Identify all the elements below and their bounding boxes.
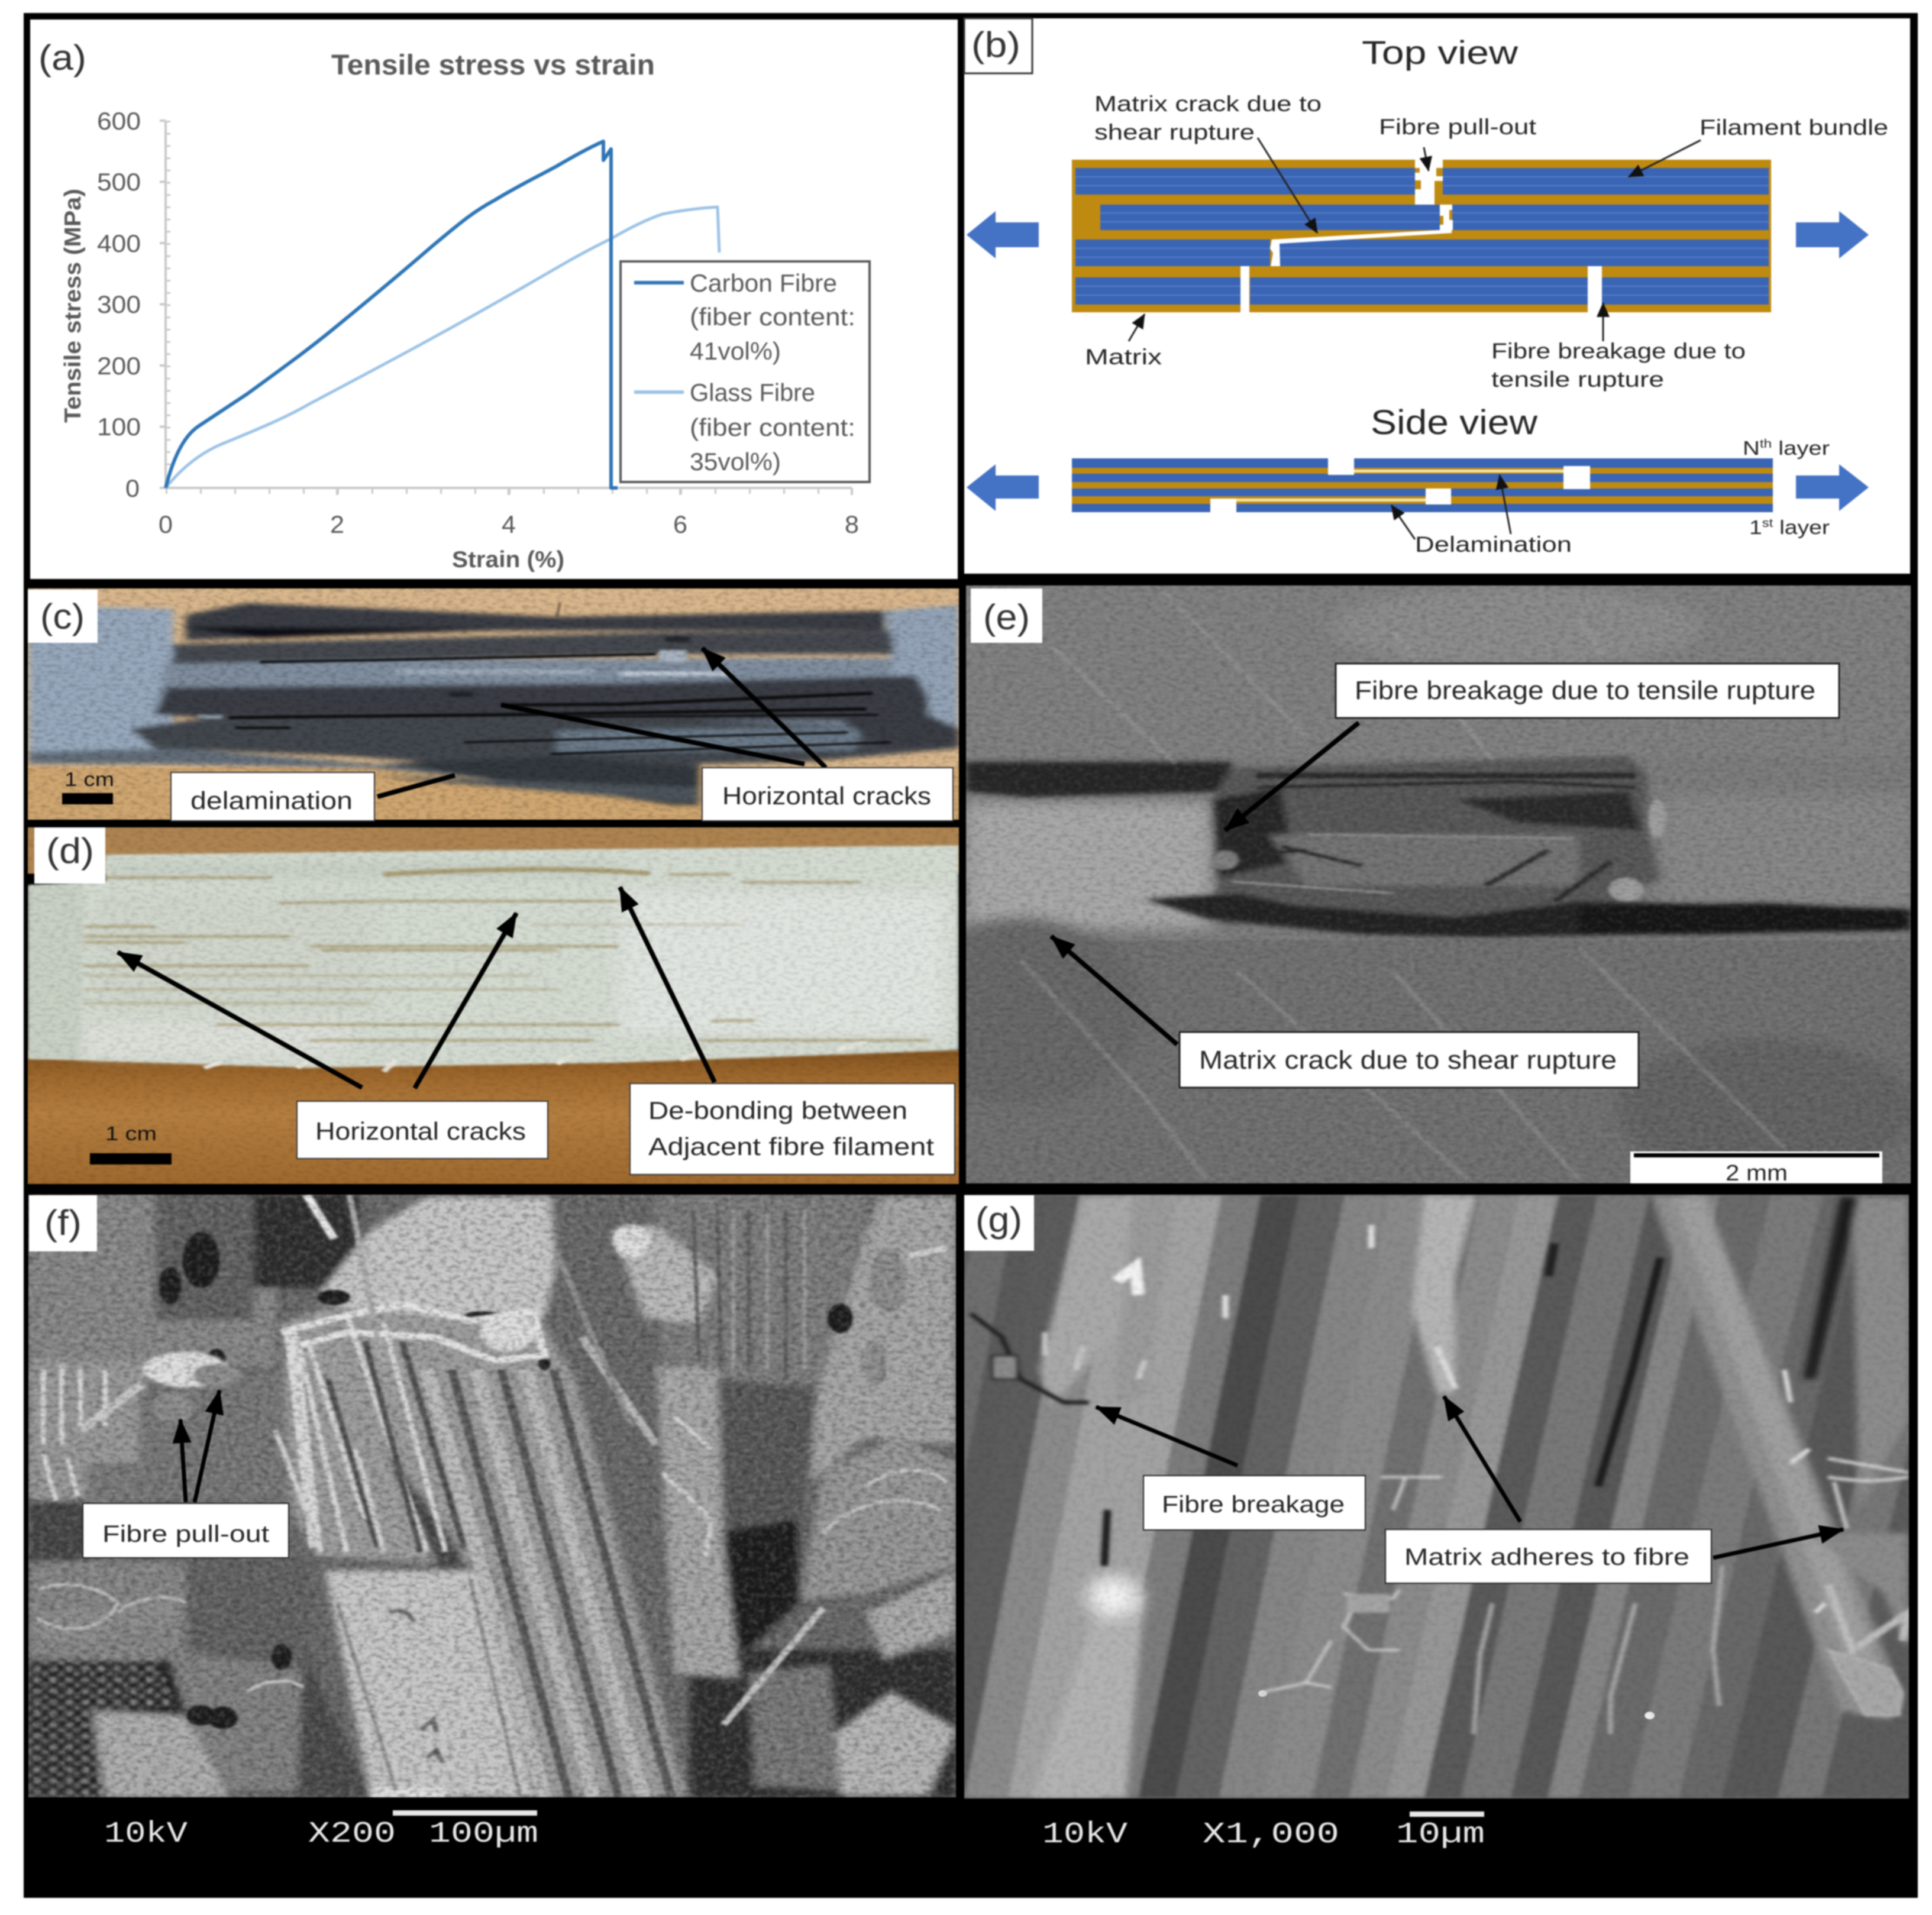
chart title: Tensile stress vs strain xyxy=(331,50,655,81)
y axis tick labels: 300 xyxy=(97,290,141,318)
top view labels: Matrix crack due to xyxy=(1094,92,1322,116)
scale bar d: 1 cm xyxy=(105,1123,157,1144)
SEM data bar f: X200 xyxy=(308,1817,396,1851)
legend: (fiber content: xyxy=(690,303,855,331)
side view tension arrows xyxy=(967,464,1869,511)
y axis tick labels xyxy=(97,107,141,502)
photo d xyxy=(25,827,965,1191)
callout: horizontal cracks d xyxy=(297,1101,548,1159)
top view labels: Fibre pull-out xyxy=(1379,115,1537,139)
y axis tick labels: 100 xyxy=(97,413,141,441)
y axis tick labels: 600 xyxy=(97,107,141,135)
panel c: carbon fibre specimen photo xyxy=(25,587,965,823)
label (g): (g) xyxy=(975,1200,1022,1240)
scale bar d xyxy=(90,1123,172,1164)
fibre bands xyxy=(815,1195,1932,1797)
top view leader lines xyxy=(1129,138,1701,341)
top view tension arrows xyxy=(967,211,1869,258)
callout: fibre breakage xyxy=(1143,1476,1365,1530)
panel a: tensile stress vs strain chart xyxy=(30,20,958,579)
arrows g xyxy=(1096,1396,1843,1558)
SEM data bar g xyxy=(1042,1812,1485,1852)
side view labels: Delamination xyxy=(1415,532,1572,557)
callout: fibre breakage: Fibre breakage xyxy=(1162,1492,1345,1518)
label (d) xyxy=(34,827,105,884)
callout: horizontal cracks c: Horizontal cracks xyxy=(722,782,931,810)
SEM data bar g: 10kV xyxy=(1042,1818,1127,1852)
photo c xyxy=(25,587,965,823)
label (b) xyxy=(964,18,1032,73)
SEM data bar f xyxy=(104,1810,538,1851)
side view labels: layer xyxy=(1773,516,1830,538)
side view labels xyxy=(1415,437,1830,557)
callout: matrix adheres to fibre: Matrix adheres to fibre xyxy=(1404,1544,1689,1570)
callout: delamination xyxy=(171,772,374,821)
y axis tick labels: 500 xyxy=(97,168,141,196)
legend: 35vol%) xyxy=(690,448,781,475)
y axis title: Tensile stress (MPa) xyxy=(60,189,86,423)
callout: fibre breakage due to tensile rupture xyxy=(1336,664,1839,718)
y axis tick labels: 400 xyxy=(97,229,141,257)
arrows e xyxy=(1051,723,1359,1044)
label (e) xyxy=(971,588,1042,643)
x axis tick labels: 8 xyxy=(845,510,859,538)
callout: matrix adheres to fibre xyxy=(1385,1529,1711,1583)
axes xyxy=(160,121,852,495)
label (b): (b) xyxy=(971,25,1020,64)
x axis tick labels: 2 xyxy=(330,510,344,538)
top view labels: Filament bundle xyxy=(1700,115,1888,140)
SEM image g xyxy=(815,1195,1932,1798)
heading: top view: Top view xyxy=(1362,34,1519,71)
SEM data bar g: X1,000 xyxy=(1203,1818,1339,1852)
label (e): (e) xyxy=(983,597,1030,637)
legend: Carbon Fibre xyxy=(690,269,837,297)
curve: carbon fibre xyxy=(166,141,618,488)
callout: delamination: delamination xyxy=(190,787,353,814)
label (f): (f) xyxy=(44,1203,82,1243)
top view diagram xyxy=(1072,160,1771,312)
callout: de-bonding: De-bonding between xyxy=(648,1096,907,1124)
side view labels: N xyxy=(1743,437,1757,459)
callout: matrix crack due to shear rupture xyxy=(1180,1032,1639,1088)
x axis title: Strain (%) xyxy=(452,547,564,572)
scale bar c xyxy=(62,768,114,804)
fibres in central bundle xyxy=(37,1195,946,1797)
top view labels: shear rupture xyxy=(1094,120,1255,144)
label (c): (c) xyxy=(40,597,85,636)
legend: Glass Fibre xyxy=(690,379,815,406)
panel d: glass fibre specimen photo xyxy=(25,827,965,1191)
top view labels: Matrix xyxy=(1085,345,1162,369)
white crack paths xyxy=(1240,160,1602,312)
curve: glass fibre xyxy=(166,207,719,488)
panel b: failure schematic xyxy=(964,18,1910,574)
arrows c xyxy=(377,648,826,797)
crossing fibre and highlights xyxy=(1033,1195,1908,1797)
callout: de-bonding xyxy=(630,1083,955,1175)
top view labels: Fibre breakage due to xyxy=(1491,339,1746,363)
side view labels: 1 xyxy=(1749,516,1760,538)
photo e xyxy=(896,584,1915,1191)
x axis tick labels: 6 xyxy=(673,510,687,538)
label (d): (d) xyxy=(46,831,94,871)
arrows f xyxy=(180,1390,219,1502)
panel g: SEM fibre surface xyxy=(815,1195,1932,1852)
callout: matrix crack due to shear rupture: Matrix crack due to shear rupture xyxy=(1199,1046,1617,1075)
SEM data bar f: 10kV xyxy=(104,1817,188,1851)
side view labels: layer xyxy=(1772,437,1830,459)
callout: fibre breakage due to tensile rupture: Fibre breakage due to tensile rupture xyxy=(1355,676,1815,705)
SEM data bar g: 10µm xyxy=(1396,1818,1485,1852)
y axis tick labels: 0 xyxy=(125,474,140,502)
SEM image f xyxy=(25,1192,965,1800)
side view labels: st xyxy=(1762,517,1773,530)
x axis tick labels xyxy=(159,510,859,538)
x axis tick labels: 0 xyxy=(159,510,173,538)
top view labels: tensile rupture xyxy=(1491,367,1664,392)
legend xyxy=(621,261,870,482)
callout: fibre pull-out: Fibre pull-out xyxy=(102,1521,269,1547)
scale bar e: 2 mm xyxy=(1726,1161,1788,1186)
callout: horizontal cracks c xyxy=(702,768,953,821)
scale bar e xyxy=(1630,1151,1882,1186)
panel f: SEM fracture surface xyxy=(25,1192,965,1851)
panel e: microscope image of rupture xyxy=(896,584,1915,1191)
SEM data bar f: 100µm xyxy=(429,1817,538,1851)
label (a): (a) xyxy=(38,38,86,77)
side view labels: th xyxy=(1760,438,1772,451)
callout: horizontal cracks d: Horizontal cracks xyxy=(315,1117,526,1145)
legend: 41vol%) xyxy=(690,337,781,365)
side view diagram xyxy=(1072,458,1773,512)
callout: de-bonding: Adjacent fibre filament xyxy=(648,1133,934,1160)
side view leader lines xyxy=(1391,475,1511,539)
scale bar c: 1 cm xyxy=(64,768,114,790)
heading: side view: Side view xyxy=(1371,403,1538,442)
label (c) xyxy=(28,590,98,643)
y axis tick labels: 200 xyxy=(97,352,141,380)
legend: (fiber content: xyxy=(690,413,855,441)
arrows d xyxy=(118,887,715,1088)
x axis tick labels: 4 xyxy=(502,510,516,538)
label (f) xyxy=(29,1195,97,1251)
label (g) xyxy=(964,1195,1034,1251)
top view labels xyxy=(1085,92,1888,392)
callout: fibre pull-out xyxy=(83,1503,289,1558)
